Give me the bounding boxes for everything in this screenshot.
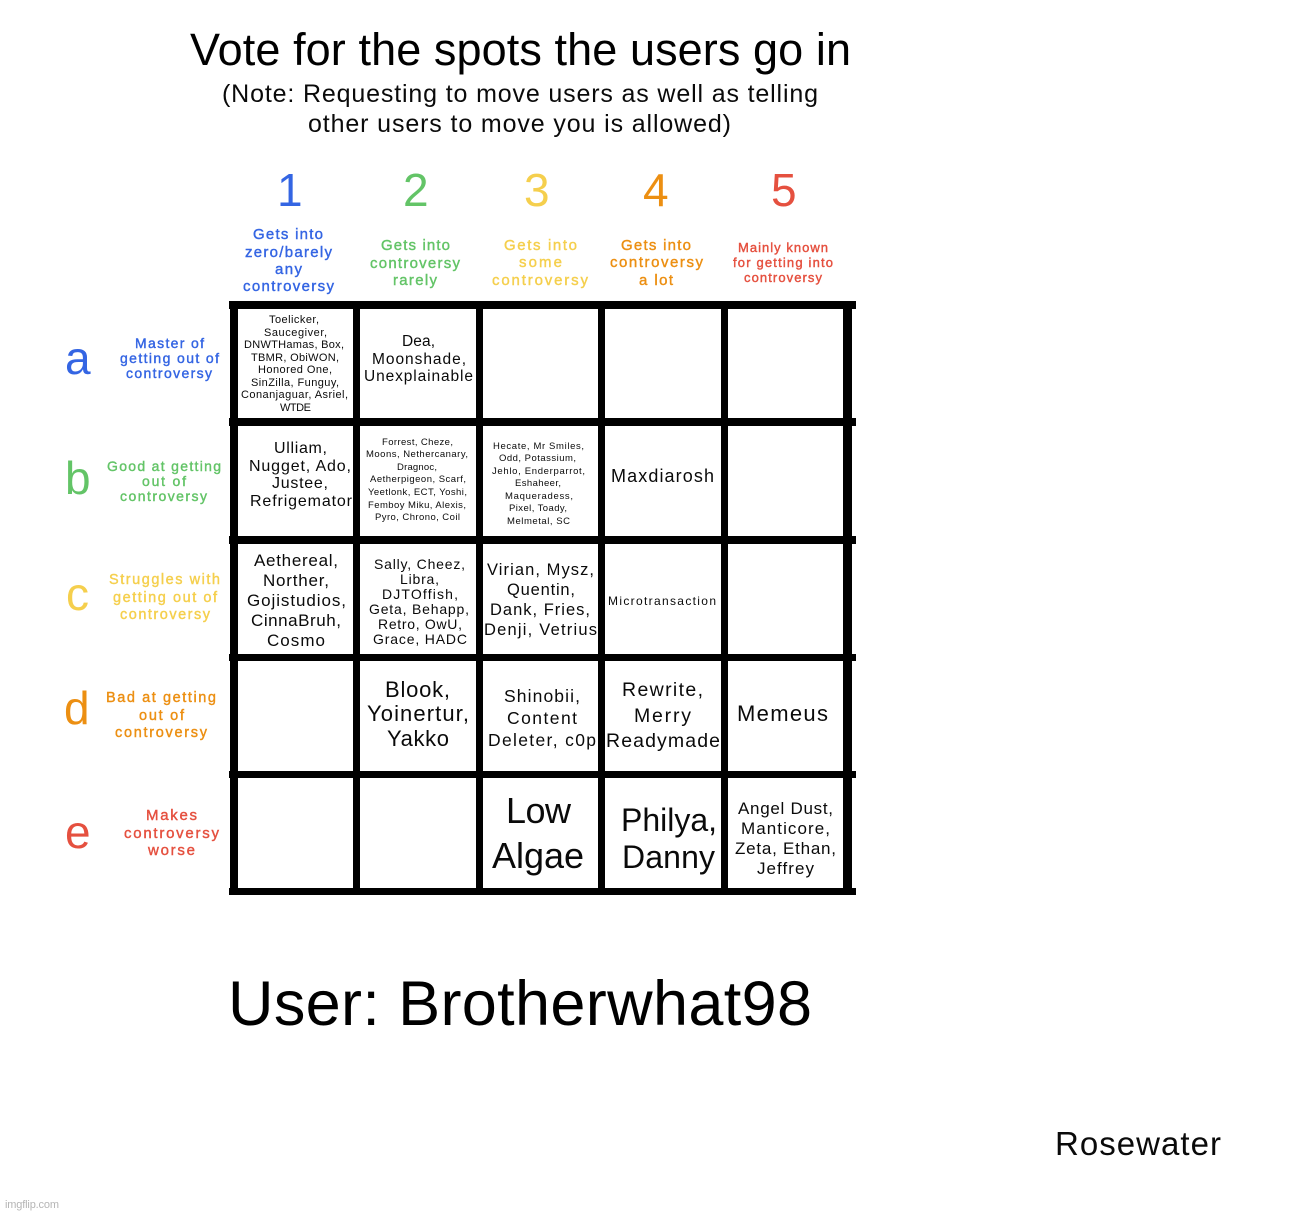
cell c3: Virian, Mysz, <box>487 561 594 579</box>
cell c3: Denji, Vetrius <box>484 621 597 639</box>
cell b1 <box>249 440 353 510</box>
cell a2: Unexplainable <box>364 368 473 385</box>
cell d5: Memeus <box>737 701 828 726</box>
cell d2: Yoinertur, <box>367 701 469 726</box>
cell d2 <box>367 677 469 751</box>
cell e3: Low <box>506 790 572 831</box>
column numbers: 3 <box>524 164 550 216</box>
cell b1: Justee, <box>272 475 328 492</box>
title: Vote for the spots the users go in <box>190 24 851 75</box>
cell b3: Hecate, Mr Smiles, <box>493 441 584 452</box>
note subtitle <box>222 80 818 138</box>
cell b2: Pyro, Chrono, Coil <box>375 512 460 523</box>
row label e: Makes <box>146 807 197 824</box>
column label 2: controversy <box>370 255 460 272</box>
cell a1: DNWTHamas, Box, <box>244 339 344 351</box>
row label d <box>106 690 216 741</box>
cell a1: TBMR, ObiWON, <box>251 352 339 364</box>
cell c2 <box>369 556 469 647</box>
cell a2: Dea, <box>402 333 435 350</box>
column label 4: a lot <box>639 272 674 289</box>
column label 3: some <box>519 254 562 271</box>
column numbers <box>277 164 797 216</box>
column label 1: any <box>275 261 302 278</box>
cell e4 <box>621 802 717 875</box>
cell c4: Microtransaction <box>608 594 716 608</box>
cell c2: Grace, HADC <box>373 631 467 647</box>
cell e5: Manticore, <box>741 819 830 838</box>
cell a1: Conanjaguar, Asriel, <box>241 389 348 401</box>
column label 1 <box>243 226 334 295</box>
row label a: controversy <box>126 365 212 381</box>
column numbers: 1 <box>277 164 303 216</box>
cell d4: Merry <box>634 705 691 727</box>
cell b2: Dragnoc, <box>397 462 437 473</box>
row label c: controversy <box>120 607 211 623</box>
cell a2: Moonshade, <box>372 351 466 368</box>
row letters <box>64 332 91 858</box>
row label a: Master of <box>135 335 204 351</box>
column label 4 <box>610 237 704 289</box>
row label a <box>120 335 219 381</box>
cell e3: Algae <box>492 835 584 876</box>
cell c2: Retro, OwU, <box>378 616 462 632</box>
column label 4: controversy <box>610 254 704 271</box>
cell a1: Honored One, <box>258 364 332 376</box>
cell b3: Maqueradess, <box>505 491 573 502</box>
cell d3: Deleter, c0p <box>488 730 596 750</box>
cell b3: Jehlo, Enderparrot, <box>492 466 585 477</box>
grid <box>229 301 856 895</box>
cell d4 <box>606 679 720 752</box>
cell b2: Yeetlonk, ECT, Yoshi, <box>368 487 467 498</box>
cell d2: Blook, <box>385 677 450 702</box>
row label b: controversy <box>120 488 207 504</box>
cell b2: Femboy Miku, Alexis, <box>368 500 466 511</box>
column numbers: 5 <box>771 164 797 216</box>
column label 4: Gets into <box>621 237 691 254</box>
row label b <box>107 458 221 504</box>
column label 3: controversy <box>492 272 588 289</box>
cell d4: Readymade <box>606 730 720 752</box>
cell b2: Aetherpigeon, Scarf, <box>370 474 466 485</box>
cell b2 <box>366 437 468 523</box>
cell d3: Content <box>507 708 577 728</box>
cell c2: DJTOffish, <box>382 586 458 602</box>
cell c1: Norther, <box>263 571 329 590</box>
cell b1: Ulliam, <box>274 440 327 457</box>
cell d2: Yakko <box>387 726 449 751</box>
cell c3: Dank, Fries, <box>490 601 590 619</box>
cell d3 <box>488 686 596 750</box>
cell b2: Forrest, Cheze, <box>382 437 453 448</box>
row label c <box>109 572 220 623</box>
column label 3: Gets into <box>504 237 577 254</box>
row letters: d <box>64 682 90 734</box>
column label 2 <box>370 237 460 289</box>
cell c3 <box>484 561 597 639</box>
column label 1: Gets into <box>253 226 323 243</box>
user name: User: Brotherwhat98 <box>228 969 812 1039</box>
cell a1 <box>241 314 348 414</box>
note subtitle: (Note: Requesting to move users as well as telling <box>222 80 818 108</box>
cell a1: Toelicker, <box>269 314 319 326</box>
cell b2: Moons, Nethercanary, <box>366 449 468 460</box>
row letters: a <box>65 332 91 384</box>
row label d: Bad at getting <box>106 690 216 706</box>
row label c: Struggles with <box>109 572 220 588</box>
row label d: controversy <box>115 725 208 741</box>
column label 5: controversy <box>744 270 822 285</box>
cell c3: Quentin, <box>507 581 575 599</box>
row label a: getting out of <box>120 350 219 366</box>
cell b3: Melmetal, SC <box>507 516 570 527</box>
cell c2: Libra, <box>400 571 439 587</box>
cell c1: Cosmo <box>267 631 325 650</box>
cell e4: Danny <box>622 839 715 875</box>
column label 5: Mainly known <box>738 240 828 255</box>
cell c2: Sally, Cheez, <box>374 556 465 572</box>
column label 1: controversy <box>243 278 334 295</box>
cell e5 <box>735 799 836 878</box>
cell b3: Odd, Potassium, <box>499 453 576 464</box>
cell a1: SinZilla, Funguy, <box>251 377 339 389</box>
column label 5: for getting into <box>733 255 833 270</box>
cell e5: Zeta, Ethan, <box>735 839 836 858</box>
cell e5: Jeffrey <box>757 859 814 878</box>
cell e5: Angel Dust, <box>738 799 833 818</box>
cell b1: Refrigemator <box>250 493 353 510</box>
column label 2: rarely <box>393 272 438 289</box>
cell b1: Nugget, Ado, <box>249 458 351 475</box>
cell b3: Eshaheer, <box>515 478 561 489</box>
row label c: getting out of <box>113 590 218 606</box>
cell c2: Geta, Behapp, <box>369 601 469 617</box>
row label b: Good at getting <box>107 458 221 474</box>
cell c1: CinnaBruh, <box>251 611 341 630</box>
row letters: b <box>65 452 91 504</box>
row letters: e <box>65 806 91 858</box>
cell e4: Philya, <box>621 802 717 838</box>
cell a2 <box>364 333 473 385</box>
cell c1 <box>247 551 346 650</box>
row letters: c <box>66 568 89 620</box>
column label 3 <box>492 237 588 289</box>
signature: Rosewater <box>1055 1125 1221 1162</box>
column label 2: Gets into <box>381 237 450 254</box>
cell d3: Shinobii, <box>504 686 580 706</box>
cell e3 <box>492 790 584 876</box>
cell b3 <box>492 441 585 527</box>
row label e <box>124 807 220 859</box>
row label d: out of <box>139 708 185 724</box>
cell d4: Rewrite, <box>622 679 703 701</box>
watermark: imgflip.com <box>5 1199 59 1211</box>
column label 1: zero/barely <box>245 244 332 261</box>
note subtitle: other users to move you is allowed) <box>308 110 731 138</box>
cell a1: Saucegiver, <box>264 327 327 339</box>
cell b4: Maxdiarosh <box>611 466 714 486</box>
row label b: out of <box>142 473 186 489</box>
cell c1: Gojistudios, <box>247 591 346 610</box>
cell b3: Pixel, Toady, <box>509 503 567 514</box>
cell a1: WTDE <box>280 402 311 414</box>
column numbers: 4 <box>643 164 669 216</box>
row label e: controversy <box>124 825 220 842</box>
column numbers: 2 <box>403 164 429 216</box>
row label e: worse <box>147 842 195 859</box>
column label 5 <box>733 240 833 285</box>
cell c1: Aethereal, <box>254 551 338 570</box>
